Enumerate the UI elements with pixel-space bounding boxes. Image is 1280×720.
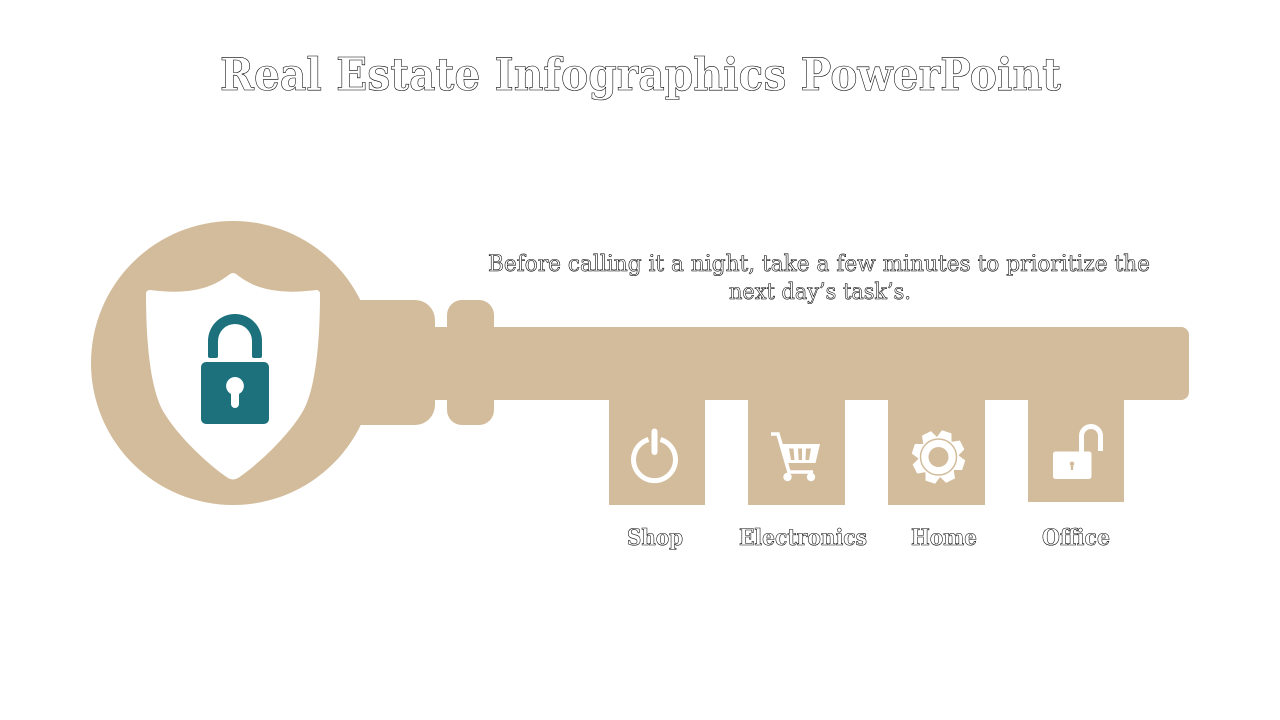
label: Home: Home bbox=[911, 525, 977, 551]
shield bbox=[146, 273, 320, 480]
key tooth: office bbox=[1028, 399, 1124, 502]
key tooth: home bbox=[888, 399, 985, 505]
key collar bbox=[447, 300, 494, 425]
key bow circle bbox=[91, 221, 375, 505]
key neck bbox=[350, 300, 435, 425]
key tooth: electronics bbox=[748, 399, 845, 505]
label: Office: Office bbox=[1042, 525, 1110, 551]
key connector bbox=[430, 327, 452, 400]
label: Shop: Shop bbox=[627, 525, 683, 551]
description text bbox=[488, 251, 1150, 305]
icon: shopping cart bbox=[771, 434, 820, 481]
icon: power bbox=[634, 432, 676, 481]
label: Electronics: Electronics bbox=[739, 525, 867, 551]
title: Real Estate Infographics PowerPoint bbox=[220, 48, 1061, 101]
key tooth: shop bbox=[609, 399, 705, 505]
key shaft bbox=[485, 327, 1189, 400]
icon: open padlock bbox=[1053, 426, 1100, 479]
padlock body bbox=[201, 362, 269, 424]
padlock shackle bbox=[208, 314, 262, 358]
padlock keyhole bbox=[226, 377, 244, 408]
icon: shield with padlock bbox=[146, 273, 320, 480]
description text: next day’s task’s. bbox=[729, 279, 911, 305]
icon: gear bbox=[911, 429, 966, 485]
description text: Before calling it a night, take a few minutes to prioritize the bbox=[488, 251, 1150, 277]
key graphic bbox=[91, 221, 1189, 505]
